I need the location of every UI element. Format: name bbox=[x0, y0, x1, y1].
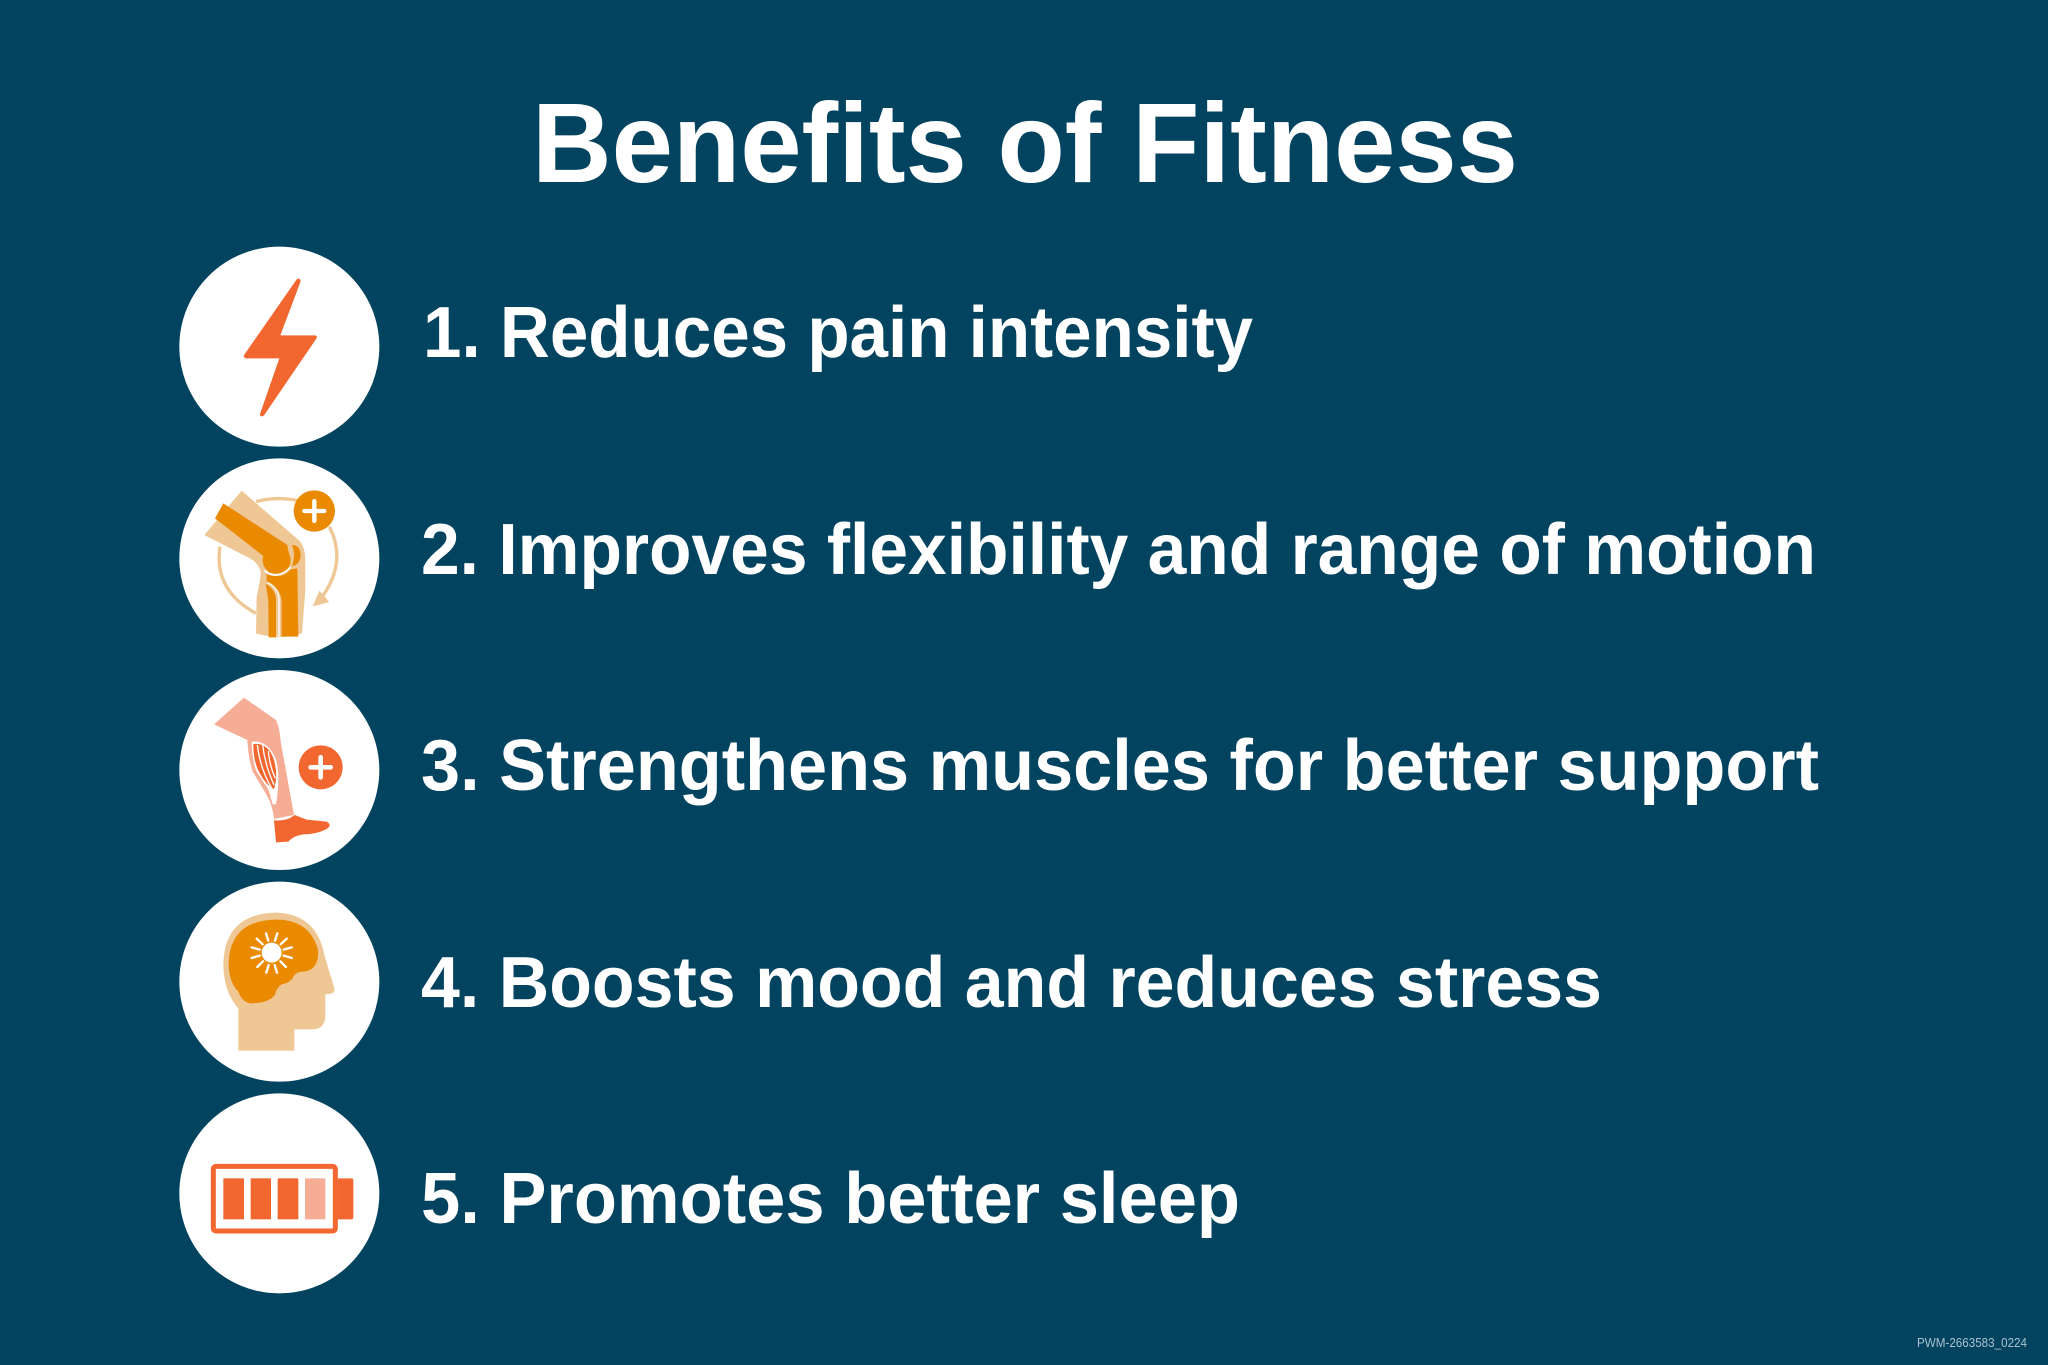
label 4: 4. Boosts mood and reduces stress bbox=[421, 943, 1602, 1023]
footer code: PWM-2663583_0224 bbox=[1917, 1335, 2027, 1350]
item 3: strengthens muscles bbox=[179, 670, 1819, 870]
label 2: 2. Improves flexibility and range of motion bbox=[421, 510, 1816, 590]
icon: lightning bolt in circle bbox=[179, 247, 379, 447]
item 5: promotes better sleep bbox=[179, 1093, 1240, 1293]
item 4: boosts mood bbox=[179, 882, 1602, 1082]
item 2: improves flexibility bbox=[179, 458, 1816, 658]
title: Benefits of Fitness bbox=[532, 80, 1518, 206]
label 1: 1. Reduces pain intensity bbox=[423, 293, 1253, 373]
label 3: 3. Strengthens muscles for better support bbox=[421, 726, 1819, 806]
item 1: reduces pain intensity bbox=[179, 247, 1253, 447]
icon: battery bbox=[179, 1093, 379, 1293]
label 5: 5. Promotes better sleep bbox=[421, 1159, 1240, 1239]
icon: leg with muscle and plus bbox=[179, 670, 379, 870]
icon: head with sunny brain bbox=[179, 882, 379, 1082]
icon: knee with range of motion arrow bbox=[179, 458, 379, 658]
